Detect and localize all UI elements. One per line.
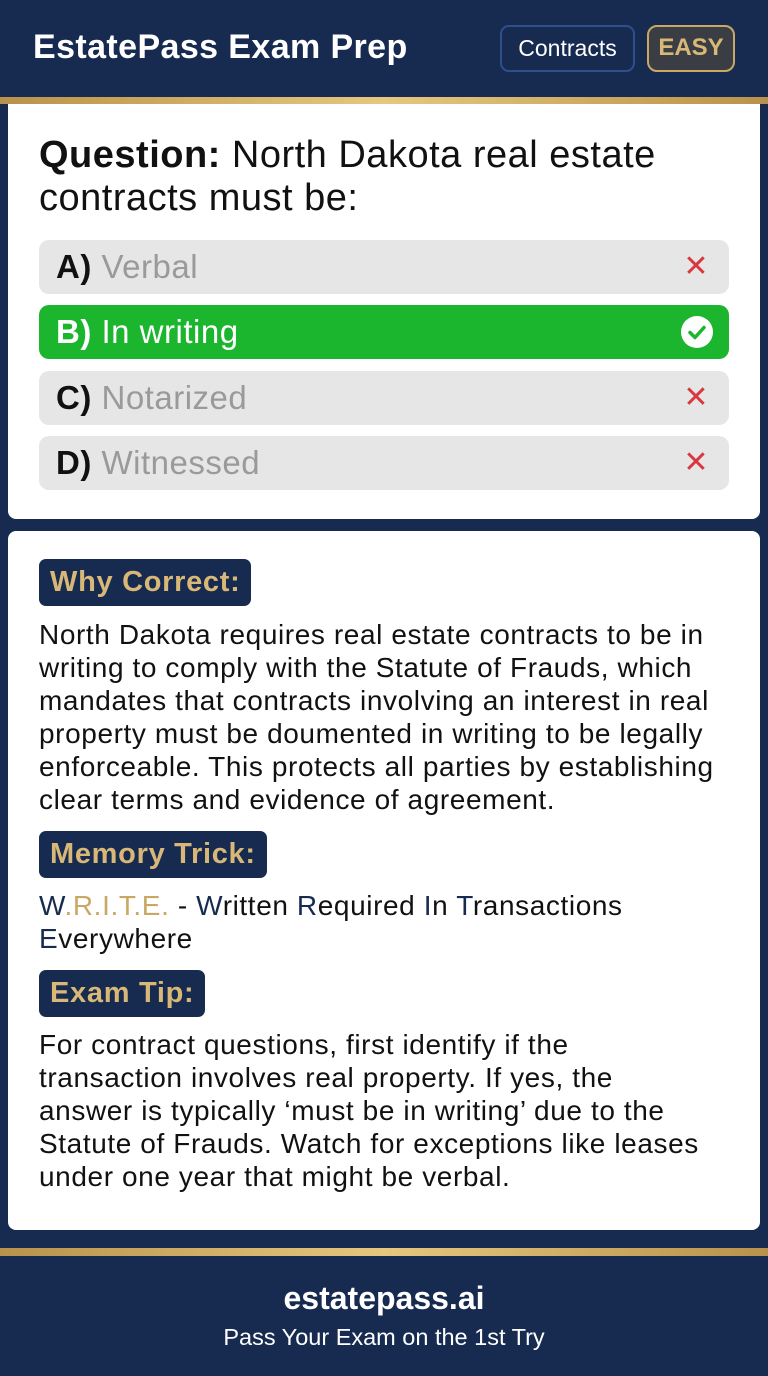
header title: EstatePass Exam Prep <box>33 28 408 66</box>
text: why correct: North Dakota requires real estate contracts to be in <box>39 619 704 650</box>
badge: contracts <box>500 25 635 72</box>
question text <box>39 134 656 219</box>
text: exam tip: under one year that might be verbal. <box>39 1161 510 1192</box>
text: exam tip: answer is typically ‘must be in writing’ due to the <box>39 1095 665 1126</box>
label: why correct <box>39 559 251 606</box>
label: exam tip: Exam Tip: <box>50 977 194 1009</box>
text: why correct: property must be doumented in writing to be legally <box>39 718 703 749</box>
badge: easy: EASY <box>658 34 724 61</box>
text: exam tip: transaction involves real property. If yes, the <box>39 1062 613 1093</box>
text: memory trick: Everywhere <box>39 923 193 954</box>
option A: A) Verbal <box>56 248 198 285</box>
question text: Question: North Dakota real estate <box>39 134 656 176</box>
label: exam tip <box>39 970 205 1017</box>
text: exam tip: For contract questions, first identify if the <box>39 1029 569 1060</box>
question text: contracts must be: <box>39 177 358 219</box>
badge: easy <box>647 25 735 72</box>
option A <box>39 240 729 294</box>
panel: explanation <box>8 531 760 1230</box>
panel: question <box>8 104 760 519</box>
text: why correct: clear terms and evidence of agreement. <box>39 784 555 815</box>
option D: D) Witnessed <box>56 444 260 481</box>
label: memory trick: Memory Trick: <box>50 838 256 870</box>
text: exam tip: Statute of Frauds. Watch for exceptions like leases <box>39 1128 699 1159</box>
icon: check <box>681 316 713 348</box>
text: why correct <box>39 619 714 815</box>
text: why correct: writing to comply with the Statute of Frauds, which <box>39 652 692 683</box>
label: memory trick <box>39 831 267 878</box>
option B correct <box>39 305 729 359</box>
label: why correct: Why Correct: <box>50 566 240 598</box>
text: why correct: enforceable. This protects all parties by establishing <box>39 751 714 782</box>
text: exam tip <box>39 1029 699 1192</box>
option C: C) Notarized <box>56 379 247 416</box>
option C <box>39 371 729 425</box>
footer tagline: Pass Your Exam on the 1st Try <box>223 1324 545 1350</box>
text: memory trick <box>39 890 623 954</box>
option B correct: B) In writing <box>56 313 239 350</box>
option D: ✕ <box>683 446 709 479</box>
footer brand: estatepass.ai <box>283 1280 484 1316</box>
text: why correct: mandates that contracts involving an interest in real <box>39 685 709 716</box>
text: memory trick: W.R.I.T.E. - Written Required In Transactions <box>39 890 623 921</box>
option C: ✕ <box>683 381 709 414</box>
badge: contracts: Contracts <box>518 35 617 61</box>
option D <box>39 436 729 490</box>
option A: ✕ <box>683 250 709 283</box>
